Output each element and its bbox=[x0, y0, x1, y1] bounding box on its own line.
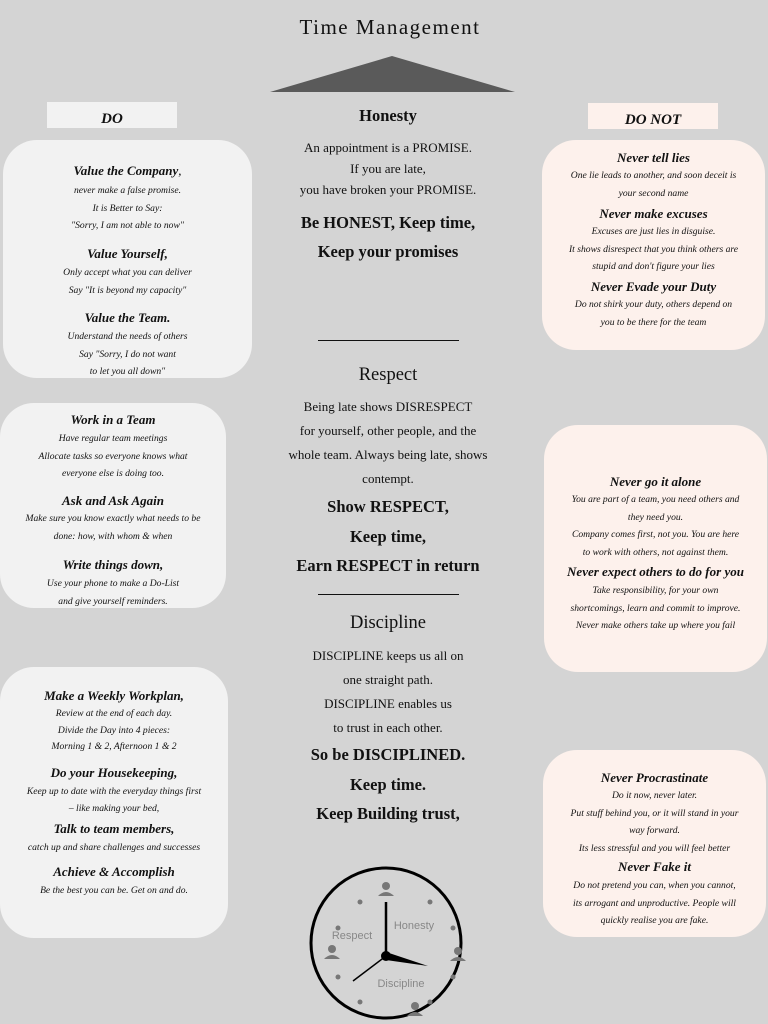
panel: do not 2: Never make others take up where you fail bbox=[576, 620, 735, 631]
panel: do not 1: It shows disrespect that you think others are bbox=[569, 244, 738, 254]
panel: do 3: Keep up to date with the everyday things first bbox=[27, 786, 201, 797]
section: respect bbox=[288, 365, 487, 575]
panel: do not 3: Do not pretend you can, when you cannot, bbox=[573, 880, 736, 891]
panel: do 1: Only accept what you can deliver bbox=[63, 267, 192, 278]
panel: do not 2: Never go it alone bbox=[610, 474, 701, 489]
panel: do 1: Understand the needs of others bbox=[68, 331, 187, 342]
panel: do not 3: way forward. bbox=[629, 825, 680, 836]
panel: do not 1: Do not shirk your duty, others depend on bbox=[575, 299, 732, 310]
panel: do not 1: Never make excuses bbox=[599, 206, 708, 221]
panel: do not 3: its arrogant and unproductive. People will bbox=[573, 898, 736, 908]
section: respect: Earn RESPECT in return bbox=[296, 556, 480, 575]
panel: do 3 bbox=[0, 667, 228, 938]
panel: do 2: Make sure you know exactly what needs to be bbox=[26, 513, 200, 524]
DO NOT label: DO NOT bbox=[625, 112, 681, 128]
panel: do 3: – like making your bed, bbox=[69, 803, 159, 814]
panel: do not 3: Never Fake it bbox=[618, 859, 691, 874]
panel: do not 1: you to be there for the team bbox=[601, 316, 706, 328]
panel: do 3: Morning 1 & 2, Afternoon 1 & 2 bbox=[51, 741, 177, 752]
panel: do 1: to let you all down" bbox=[90, 366, 165, 377]
section: discipline: to trust in each other. bbox=[333, 720, 443, 735]
section: discipline: one straight path. bbox=[343, 672, 433, 687]
clock: Respect bbox=[332, 930, 372, 942]
panel: do not 1 bbox=[542, 140, 765, 350]
roof triangle bbox=[270, 56, 515, 92]
panel: do 2: Use your phone to make a Do-List bbox=[47, 578, 179, 589]
section: respect: whole team. Always being late, shows bbox=[289, 447, 487, 462]
panel: do 3: Do your Housekeeping, bbox=[51, 765, 177, 780]
section: discipline: DISCIPLINE enables us bbox=[324, 696, 452, 711]
section: respect: Respect bbox=[359, 365, 417, 385]
panel: do not 3: Put stuff behind you, or it will stand in your bbox=[571, 808, 738, 818]
panel: do not 3: Its less stressful and you will feel better bbox=[579, 842, 730, 854]
clock bbox=[310, 866, 466, 1020]
panel: do 2 bbox=[0, 403, 226, 608]
panel: do not 3: quickly realise you are fake. bbox=[601, 915, 708, 926]
section: discipline: Keep Building trust, bbox=[316, 804, 460, 823]
panel: do 1 bbox=[3, 140, 252, 378]
panel: do not 1: One lie leads to another, and soon deceit is bbox=[571, 170, 736, 181]
panel: do not 1: Never Evade your Duty bbox=[591, 279, 716, 294]
panel: do 2: everyone else is doing too. bbox=[62, 468, 164, 479]
panel: do 1: Value Yourself, bbox=[87, 246, 168, 261]
panel: do 3: Divide the Day into 4 pieces: bbox=[58, 725, 170, 736]
panel: do not 2: Company comes first, not you. You are here bbox=[572, 529, 739, 540]
panel: do not 2: Never expect others to do for you bbox=[567, 564, 744, 579]
panel: do 2: and give yourself reminders. bbox=[58, 596, 168, 606]
section: honesty: If you are late, bbox=[350, 161, 426, 176]
panel: do 1: Say "It is beyond my capacity" bbox=[69, 284, 186, 296]
section: discipline: Discipline bbox=[350, 613, 426, 633]
section: respect: Being late shows DISRESPECT bbox=[304, 399, 472, 414]
panel: do 1: Value the Team. bbox=[85, 310, 170, 325]
panel: do 2: Allocate tasks so everyone knows what bbox=[39, 450, 187, 462]
section: discipline: Keep time. bbox=[350, 774, 426, 794]
panel: do not 1: stupid and don't figure your lies bbox=[592, 261, 715, 272]
panel: do 2: done: how, with whom & when bbox=[54, 530, 172, 542]
section: discipline: So be DISCIPLINED. bbox=[311, 745, 465, 764]
title: Time Management bbox=[300, 15, 480, 39]
panel: do not 3 bbox=[543, 750, 766, 937]
panel: do 3: Review at the end of each day. bbox=[56, 708, 172, 719]
section: honesty: you have broken your PROMISE. bbox=[300, 182, 476, 197]
panel: do not 3: Never Procrastinate bbox=[601, 770, 708, 785]
clock: Honesty bbox=[394, 920, 435, 932]
section: honesty: Keep your promises bbox=[318, 242, 458, 261]
panel: do not 2: shortcomings, learn and commit to improve. bbox=[571, 602, 740, 614]
panel: do not 2: Take responsibility, for your own bbox=[593, 585, 718, 596]
section: respect: Keep time, bbox=[350, 526, 426, 546]
panel: do not 2: to work with others, not against them. bbox=[583, 546, 728, 558]
panel: do 2: Work in a Team bbox=[71, 412, 155, 427]
panel: do not 2: they need you. bbox=[628, 512, 683, 522]
section: honesty: Be HONEST, Keep time, bbox=[301, 213, 475, 232]
panel: do 3: Make a Weekly Workplan, bbox=[44, 688, 184, 703]
panel: do not 1: your second name bbox=[619, 188, 688, 198]
panel: do 1: "Sorry, I am not able to now" bbox=[71, 220, 184, 231]
panel: do not 2: You are part of a team, you need others and bbox=[572, 494, 739, 505]
section: discipline: DISCIPLINE keeps us all on bbox=[313, 648, 463, 663]
panel: do not 3: Do it now, never later. bbox=[612, 790, 697, 801]
panel: do 2: Write things down, bbox=[63, 557, 163, 572]
section: honesty: Honesty bbox=[359, 106, 417, 125]
section: respect: Show RESPECT, bbox=[327, 497, 449, 516]
section: honesty bbox=[300, 106, 476, 261]
DO label: DO bbox=[101, 111, 123, 127]
section: respect: contempt. bbox=[362, 471, 414, 486]
panel: do not 2 bbox=[544, 425, 767, 672]
DO NOT label bbox=[588, 103, 718, 129]
panel: do 1: Say "Sorry, I do not want bbox=[79, 348, 176, 360]
panel: do 3: Achieve & Accomplish bbox=[53, 864, 175, 879]
panel: do 2: Ask and Ask Again bbox=[62, 493, 164, 508]
panel: do 3: Talk to team members, bbox=[54, 821, 174, 836]
DO label bbox=[47, 102, 177, 128]
panel: do 1: Value the Company, bbox=[74, 163, 182, 178]
panel: do 3: Be the best you can be. Get on and do. bbox=[40, 885, 188, 896]
panel: do not 1: Excuses are just lies in disguise. bbox=[592, 226, 715, 237]
section: respect: for yourself, other people, and the bbox=[300, 423, 476, 438]
clock: Discipline bbox=[377, 978, 425, 990]
section: honesty: An appointment is a PROMISE. bbox=[304, 140, 472, 155]
panel: do not 1: Never tell lies bbox=[617, 150, 690, 165]
panel: do 1: It is Better to Say: bbox=[93, 202, 162, 214]
panel: do 3: catch up and share challenges and successes bbox=[28, 842, 200, 853]
panel: do 1: never make a false promise. bbox=[74, 185, 181, 196]
panel: do 2: Have regular team meetings bbox=[59, 433, 167, 444]
section: discipline bbox=[311, 613, 465, 823]
